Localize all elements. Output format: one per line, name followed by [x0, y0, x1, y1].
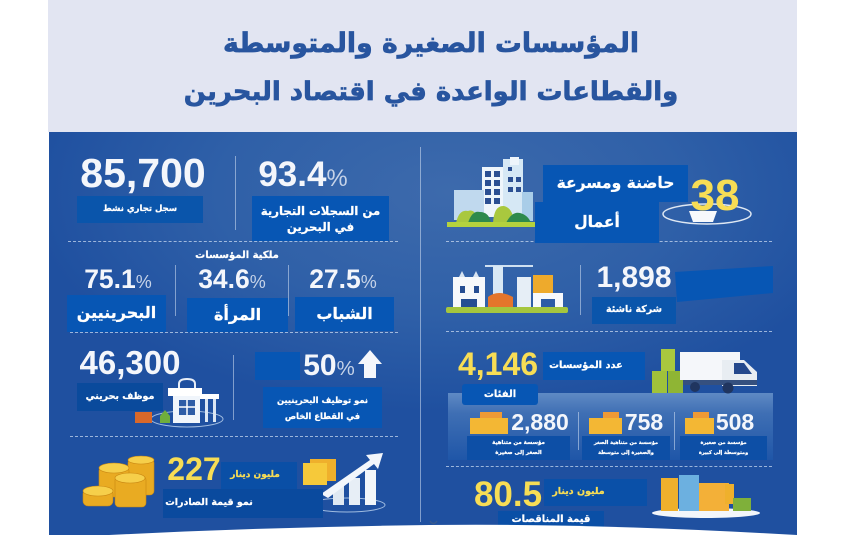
label line 2 [535, 202, 659, 243]
stat: women ownership [187, 264, 288, 332]
blank label patch [675, 266, 773, 302]
number 85,700: 85,700 [80, 150, 206, 196]
number 2,880: 2,880 [511, 409, 569, 435]
icon: gold coins [82, 456, 154, 508]
label [582, 436, 670, 460]
number 50% [303, 349, 355, 382]
label: tenders [498, 511, 604, 527]
label: million dinars [221, 462, 297, 490]
label [252, 196, 389, 241]
number 758: 758 [625, 409, 663, 435]
label [77, 196, 203, 223]
panel: blue statistics background [49, 132, 797, 535]
title: المؤسسات الصغيرة والمتوسطة [223, 28, 639, 59]
label: نمو توظيف البحرينيين [277, 394, 368, 404]
label [295, 297, 394, 331]
stat: business incubators [447, 157, 752, 243]
icon: pedestal ring [662, 203, 752, 225]
label: في البحرين [287, 220, 354, 234]
number 93.4%: 93.4 [258, 155, 326, 194]
category: micro to medium [582, 409, 670, 460]
label [67, 295, 166, 332]
label: مؤسسة من متناهية الصغر [594, 440, 658, 446]
label: مؤسسة من متناهية [492, 440, 545, 446]
stat: youth ownership [295, 264, 394, 331]
stat: Bahraini employees [77, 344, 224, 428]
stat: tenders value [474, 475, 760, 526]
number 38: 38 [691, 171, 739, 220]
label: export growth: نمو قيمة الصادرات [165, 497, 253, 508]
number 93.4%: % [326, 165, 348, 192]
label line 1 [543, 165, 688, 202]
label: سجل تجاري نشط [103, 204, 177, 214]
label: ومتوسطة إلى كبيرة [699, 450, 748, 456]
number 34.6%: % [250, 272, 266, 292]
heading: ownership: ملكية المؤسسات [195, 250, 279, 261]
label: المرأة [214, 305, 261, 324]
number 50%: 50 [303, 349, 337, 382]
stat: active commercial records [77, 150, 206, 223]
icon: truck and crates [652, 349, 757, 394]
stat: export value growth [82, 451, 386, 518]
icon: crate [685, 412, 714, 434]
label: موظف بحريني [86, 391, 154, 402]
label: tenders: قيمة المناقصات [512, 514, 590, 524]
label: categories: الفئات [484, 389, 516, 400]
number 508: 508 [716, 409, 754, 435]
label: شركة ناشئة [606, 304, 662, 315]
label: number of enterprises [543, 352, 645, 380]
label: البحرينيين [77, 303, 156, 322]
icon: crates on tray [652, 475, 760, 518]
icon: crate [470, 412, 508, 434]
panel: categories background [448, 393, 773, 460]
title [184, 28, 678, 107]
number 4,146: 4,146 [458, 346, 538, 382]
label: million dinars [544, 479, 647, 506]
stat: share of commercial records [252, 155, 389, 241]
stat: Bahraini employment growth [255, 349, 382, 428]
icon: growth chart [303, 453, 386, 512]
category: micro to small [467, 409, 570, 460]
number 75.1%: 75.1 [84, 264, 136, 294]
category: small to large [680, 409, 767, 460]
blank label patch [255, 352, 300, 380]
bottom white curve [110, 524, 796, 535]
icon: factory [446, 265, 568, 313]
icon: small logo mark [430, 520, 438, 524]
label: export growth [163, 489, 323, 518]
label line 2: أعمال [574, 213, 620, 231]
icon: bank building [135, 378, 224, 428]
number 27.5%: % [361, 272, 377, 292]
label: والصغيرة إلى متوسطة [598, 450, 654, 456]
number 1,898: 1,898 [596, 261, 672, 294]
number 27.5%: 27.5 [309, 264, 361, 294]
stat: Bahraini ownership [67, 264, 166, 332]
label: الشباب [316, 304, 373, 323]
label: number of enterprises: عدد المؤسسات [549, 360, 623, 371]
stat: number of enterprises [448, 346, 773, 460]
stat: startups [446, 261, 773, 324]
number 46,300: 46,300 [80, 344, 180, 381]
label: مؤسسة من صغيرة [700, 440, 747, 446]
number 34.6%: 34.6 [198, 264, 250, 294]
label [263, 387, 382, 428]
label [680, 436, 767, 460]
number 227: 227 [167, 451, 221, 487]
label: في القطاع الخاص [285, 410, 360, 420]
label [187, 298, 288, 332]
icon: up arrow [358, 350, 382, 378]
icon: office buildings [447, 157, 535, 227]
label [467, 436, 570, 460]
label: الصغر إلى صغيرة [495, 450, 542, 456]
label [592, 297, 676, 324]
label: million dinars: مليون دينار [552, 486, 605, 497]
number 80.5: 80.5 [474, 475, 542, 514]
title: والقطاعات الواعدة في اقتصاد البحرين [184, 77, 678, 107]
label line 1: حاضنة ومسرعة [557, 174, 674, 192]
label: من السجلات التجارية [261, 204, 380, 218]
label [77, 383, 163, 411]
number 50%: % [337, 358, 355, 380]
label: categories [462, 384, 538, 405]
header band [48, 0, 797, 132]
label: million dinars: مليون دينار [230, 470, 280, 480]
number 75.1%: % [136, 272, 152, 292]
icon: crate [589, 412, 622, 434]
